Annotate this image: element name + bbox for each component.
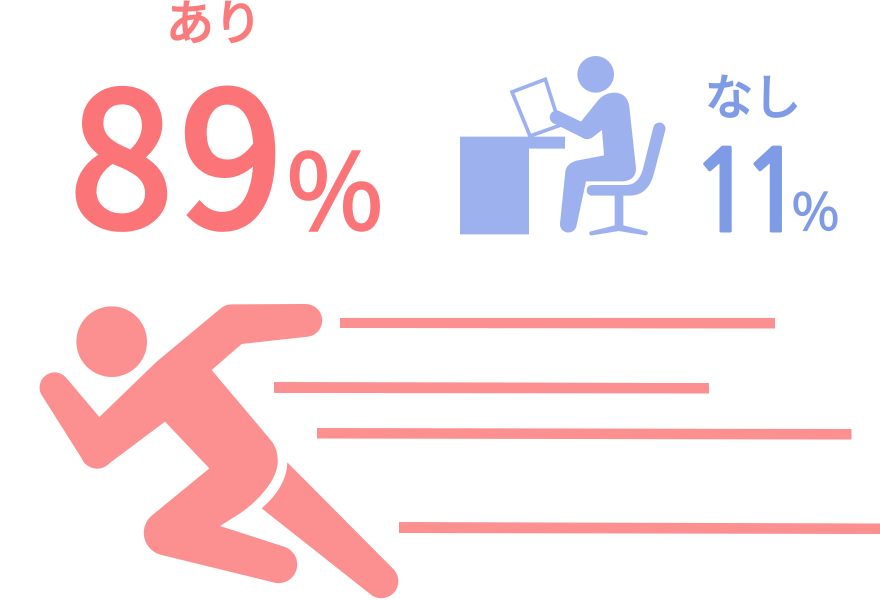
unit: percent for 89: %	[287, 108, 383, 259]
unit: percent for 11: %	[792, 171, 839, 245]
person head	[577, 56, 614, 93]
desk	[460, 137, 565, 234]
icon: sprinting runner	[40, 304, 398, 598]
icon: person working at desk	[460, 56, 665, 235]
runner rear leg	[262, 462, 398, 598]
document held by person	[512, 79, 560, 136]
value: 11: 11	[688, 136, 789, 249]
office chair	[587, 123, 665, 235]
person body	[550, 93, 636, 233]
label: なし: なし	[705, 58, 801, 128]
runner torso and arms and front leg	[40, 304, 322, 583]
speed lines	[274, 318, 880, 534]
runner head	[76, 306, 147, 377]
value: 89: 89	[70, 12, 289, 280]
